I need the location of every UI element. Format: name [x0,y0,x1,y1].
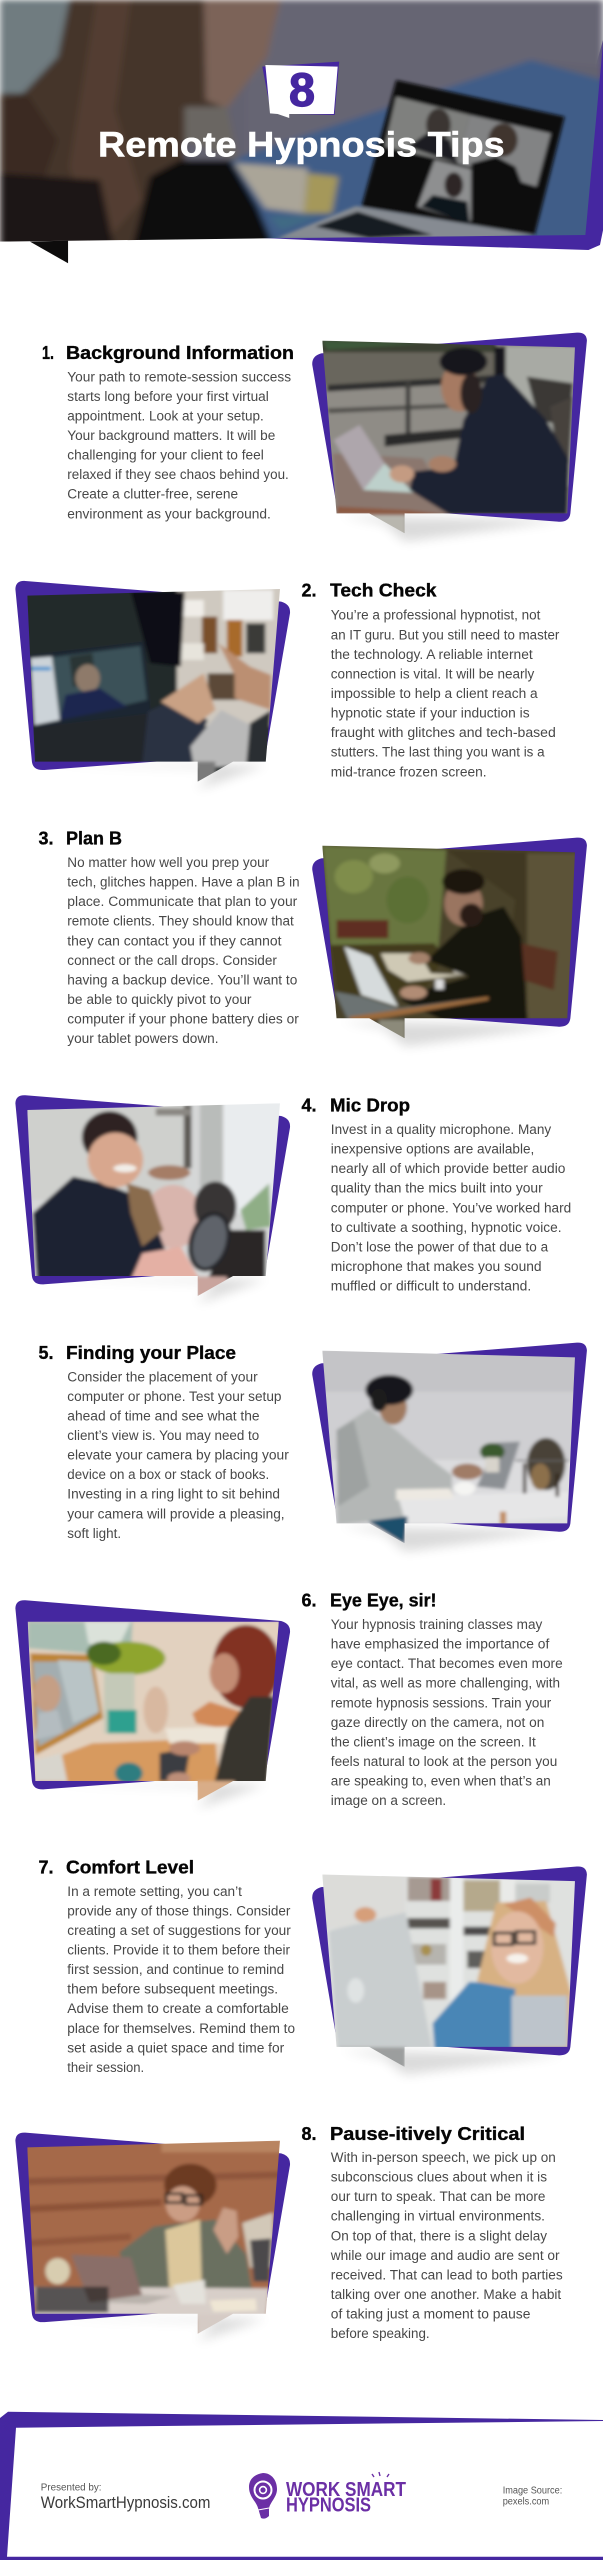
tip 6 text: feels natural to look at the person you [331,1754,557,1769]
tip 8 text: of taking just a moment to pause [331,2307,530,2322]
tip 6 text: Your hypnosis training classes may [331,1617,543,1632]
tip 8 text: received. That can lead to both parties [331,2267,563,2282]
tip 5 text: computer or phone. Test your setup [67,1389,282,1404]
tip 2 text: hypnotic state if your induction is [331,706,530,721]
tip 3 text: connect or the call drops. Consider [67,953,277,968]
title: Remote Hypnosis Tips [98,126,505,164]
tip 4 text: to cultivate a soothing, hypnotic voice. [331,1220,562,1235]
tip 8 text: before speaking. [331,2326,430,2341]
tip 1 heading: 1. [42,342,54,363]
tip 2 heading: 2. [302,580,316,601]
tip 4 text: computer or phone. You’ve worked hard [331,1200,571,1215]
tip 8 text: With in-person speech, we pick up on [331,2150,556,2165]
tip 5 text [67,1369,289,1541]
tip 7 text: their session. [67,2060,144,2075]
header banner [0,0,603,263]
tip 8 text: while our image and audio are sent or [330,2248,560,2263]
tip 4 text: inexpensive options are available, [331,1142,534,1157]
speech tail [30,241,68,263]
tip 1 text: Your path to remote-session success [67,369,291,384]
tip 3 text: having a backup device. You’ll want to [67,972,297,987]
tip 3 text: computer if your phone battery dies or [67,1012,299,1027]
tip 7 heading: 7. [38,1856,54,1877]
tip 7 text: In a remote setting, you can’t [67,1884,242,1899]
tip 4 image: woman at podcast microphone [15,1095,290,1304]
tip 1 text: environment as your background. [67,506,271,521]
tip 5 heading: 5. [38,1342,54,1363]
tip 6 text: vital, as well as more challenging, with [331,1676,560,1691]
tip 5 text: soft light. [67,1526,121,1541]
tip 7 text: provide any of those things. Consider [67,1903,291,1918]
tip 1 text: Your background matters. It will be [67,428,275,443]
tip 1 text: starts long before your first virtual [67,389,269,404]
tip 2 text: fraught with glitches and tech-based [331,725,556,740]
tip 4 text [331,1122,571,1294]
tip 5 text: your camera will provide a pleasing, [67,1506,285,1521]
tip 3 heading [38,827,122,848]
tip 1 text: Create a clutter-free, serene [67,487,238,502]
presented by: Presented by: [41,2482,102,2494]
tip 1 text: challenging for your client to feel [67,448,264,463]
tip 5 text: device on a box or stack of books. [67,1467,269,1482]
tip 7 heading: Comfort Level [66,1856,194,1877]
presented by [41,2482,210,2512]
tip 5 image: man in hoodie at laptop [312,1343,587,1552]
icon: sparks [372,2472,389,2477]
image source: Image Source: [503,2485,562,2496]
logo [249,2472,406,2519]
tip 8 text: talking over one another. Make a habit [331,2287,561,2302]
tip 7 text: first session, and continue to remind [67,1962,284,1977]
tip 1 heading: Background Information [66,342,294,363]
tip 2 text: impossible to help a client reach a [331,686,538,701]
tip 4 text: Invest in a quality microphone. Many [331,1122,551,1137]
tip 7 text: clients. Provide it to them before their [67,1942,291,1958]
tip 6 text: eye contact. That becomes even more [331,1656,563,1671]
tip 1 text: appointment. Look at your setup. [67,408,264,423]
tip 2 text: an IT guru. But you still need to master [331,627,560,642]
tip 6 text: remote hypnosis sessions. Train your [331,1695,552,1710]
tip 3 text: be able to quickly pivot to your [67,992,252,1007]
tip 6 heading: Eye Eye, sir! [330,1590,436,1611]
tip 2 text: You’re a professional hypnotist, not [331,608,541,623]
tip 2 text: connection is vital. It will be nearly [331,666,535,681]
tip 5 text: elevate your camera by placing your [67,1448,289,1463]
tip 7 image: smiling woman in headphones [312,1866,587,2078]
image source: pexels.com [503,2497,549,2508]
tip 2 heading: Tech Check [330,580,437,601]
tip 3 text: place. Communicate that plan to your [67,894,298,909]
tip 6 text: have emphasized the importance of [331,1637,550,1652]
tip 4 text: quality than the mics built into your [331,1181,543,1196]
tip 6 text: image on a screen. [331,1793,446,1808]
logo: HYPNOSIS [286,2494,371,2517]
tip 4 text: nearly all of which provide better audio [331,1161,565,1176]
tip 3 text [67,855,300,1046]
tip 6 text: gaze directly on the camera, not on [331,1715,544,1730]
tip 1 image: man with laptop outdoors [312,333,587,542]
footer [0,2412,603,2560]
tip 2 text: stutters. The last thing you want is a [331,745,545,760]
tip 8 text: On top of that, there is a slight delay [331,2228,547,2243]
tip 2 image: video call on laptop [15,581,290,790]
tip 1 text [67,369,291,521]
tip 6 text [331,1617,563,1808]
tip 5 heading: Finding your Place [66,1342,236,1363]
tip 5 text: ahead of time and see what the [67,1408,260,1423]
tip 7 text [67,1884,295,2075]
tip 4 text: muffled or difficult to understand. [331,1279,531,1294]
tip 3 text: they can contact you if they cannot [67,933,282,948]
tip 4 heading: 4. [302,1094,316,1115]
tip 5 text: Consider the placement of your [67,1369,258,1384]
tip 3 heading: 3. [38,827,54,848]
tip 7 text: Advise them to create a comfortable [67,2001,289,2016]
presented by: WorkSmartHypnosis.com [41,2494,210,2512]
tip 8 heading: 8. [302,2123,316,2144]
tip 8 heading: Pause-itively Critical [330,2123,525,2144]
tip 7 text: them before subsequent meetings. [67,1982,278,1997]
tip 6 heading: 6. [302,1590,316,1611]
number badge [262,62,339,118]
header photo: woman on a video call [0,0,603,253]
tip 4 heading: Mic Drop [330,1094,410,1115]
tip 7 text: creating a set of suggestions for your [67,1923,291,1938]
tip 2 text [331,608,560,779]
logo: WORK SMART [286,2478,406,2501]
tip 3 heading: Plan B [66,827,122,848]
tip 1 text: relaxed if they see chaos behind you. [67,467,289,482]
tip 3 image: man at laptop by plant wall [312,838,587,1047]
header purple frame [246,40,603,250]
tip 5 text: client’s view is. You may need to [67,1428,259,1443]
tip 2 text: mid-trance frozen screen. [331,764,487,779]
tip 8 text: our turn to speak. That can be more [331,2189,545,2204]
footer purple frame [0,2412,603,2560]
tip 6 text: are speaking to, even when that’s an [331,1774,551,1789]
tip 7 text: place for themselves. Remind them to [67,2021,295,2036]
icon: spiral light bulb [249,2473,277,2519]
tip 4 text: microphone that makes you sound [331,1259,542,1274]
tip 6 image: woman on video call at home desk [15,1600,290,1809]
tip 7 text: set aside a quiet space and time for [67,2040,285,2055]
tip 2 text: the technology. A reliable internet [331,647,533,662]
tip 6 text: the client’s image on the screen. It [331,1734,536,1749]
tip 3 text: No matter how well you prep your [67,855,270,870]
number 8: 8 [289,63,315,116]
tip 8 text [330,2150,563,2341]
tip 3 text: your tablet powers down. [67,1031,218,1046]
tip 3 text: remote clients. They should know that [67,914,294,929]
tip 3 text: tech, glitches happen. Have a plan B in [67,875,300,890]
tip 4 text: Don’t lose the power of that due to a [331,1239,549,1254]
tip 8 text: challenging in virtual environments. [331,2209,545,2224]
tip 8 text: subconscious clues about when it is [331,2170,547,2185]
image source [503,2485,562,2508]
tip 5 text: Investing in a ring light to sit behind [67,1487,280,1502]
tip 8 image: woman waving at laptop, brick wall [15,2133,290,2342]
